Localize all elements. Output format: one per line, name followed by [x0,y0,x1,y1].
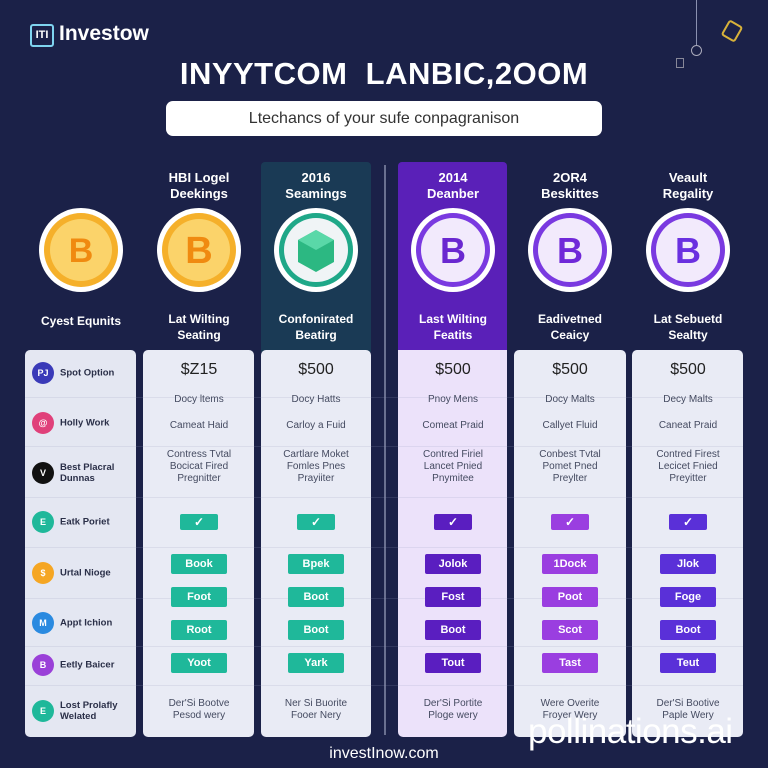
row labels panel: E [40,517,46,527]
title: INYYTCOM LANBIC,2OOM [180,56,588,91]
icon: logo mark [30,24,54,47]
column headings: 2014 [439,170,467,185]
table cells: Tast [559,657,581,669]
column headings [169,170,714,201]
table cells: Preylter [553,473,587,484]
row labels panel: Eetly Baicer [60,660,114,670]
table cells: Callyet Fluid [542,420,598,431]
table cells: Jlok [677,558,699,570]
table cells: Der'Si Portite [424,698,482,709]
row labels panel: Holly Work [60,418,109,428]
row labels panel: V [40,468,46,478]
column sublabels: Lat Wilting [168,312,230,326]
highlight panel: teal column [261,162,371,352]
table cells: Pregnitter [177,473,221,484]
coin icons: B [440,230,466,271]
table cells: Foot [187,591,211,603]
table cells: Cameat Haid [170,420,228,431]
table cells: Root [186,624,212,636]
logo text: Investow [59,22,149,45]
column headings: 2OR4 [553,170,587,185]
footer url: investInow.com [329,745,439,762]
coin icons: B [675,230,701,271]
divider [384,165,386,735]
column sublabels: Cyest Equnits [41,314,121,328]
table cells: Cartlare Moket [283,449,349,460]
row labels panel: Appt Ichion [60,618,112,628]
column headings: HBI Logel [169,170,229,185]
row labels panel: B [40,660,46,670]
column sublabels: Seating [177,328,221,342]
table cells: $500 [670,361,706,378]
table cells: $500 [298,361,334,378]
table cells: $500 [552,361,588,378]
column headings: Deanber [427,186,479,201]
table cells: ✓ [565,515,575,529]
table cells: Yark [304,657,328,669]
table cells: Docy ltems [174,394,224,405]
row labels panel: Best Placral [60,462,114,473]
table cells: Paple Wery [662,710,714,721]
row labels panel: M [39,618,47,628]
row labels panel: Welated [60,711,96,722]
row labels panel [32,362,118,722]
column headings: Beskittes [541,186,599,201]
table cells: Poot [558,591,582,603]
table cells: Tout [441,657,464,669]
highlight panel: purple column [398,162,507,352]
watermark: pollinations.ai [528,712,733,751]
row labels panel: Eatk Poriet [60,516,110,528]
table cells: Pesod wery [173,710,225,721]
table cells: Lecicet Fnied [658,461,718,472]
coin icons [39,208,730,292]
row labels panel: Urtal Nioge [60,568,111,578]
column headings: Seamings [285,186,347,201]
column sublabels: Beatirg [295,328,337,342]
subtitle box [166,101,602,136]
row labels panel: Dunnas [60,473,95,484]
row labels panel: @ [39,418,47,428]
column sublabels: Last Wilting [419,312,487,326]
column sublabels [41,312,722,342]
table cells: Contred Firiel [423,449,483,460]
table cells: ✓ [194,515,204,529]
table cells: Conbest Tvtal [539,449,601,460]
table cells: Pnymitee [432,473,474,484]
table cells: ✓ [311,515,321,529]
row labels panel: E [40,706,46,716]
row labels panel: $ [40,568,46,578]
coin icons: B [557,230,583,271]
table cells: Contress Tvtal [167,449,231,460]
table cells: Scot [558,624,582,636]
column headings: Deekings [170,186,228,201]
table cells: ✓ [448,515,458,529]
table cells: $500 [435,361,471,378]
column headings: 2016 [302,170,330,185]
table cells: Der'Si Bootive [656,698,720,709]
table cells: Decy Malts [663,394,713,405]
table cells: Were Overite [541,698,599,709]
table cells: $Z15 [181,361,217,378]
table cells: Caneat Praid [659,420,717,431]
table cells: Fooer Nery [291,710,341,721]
row labels panel: Lost Prolafly [60,700,118,711]
table cells: Bocicat Fired [170,461,228,472]
column sublabels: Ceaicy [551,328,589,342]
row labels panel: Spot Option [60,368,114,378]
table cells: Preyitter [669,473,707,484]
table cells: Contred Firest [656,449,720,460]
table cells: Comeat Praid [422,420,484,431]
table cells: Boot [440,624,466,636]
subtitle box: Ltechancs of your sufe conpagranison [249,110,519,127]
table cells: Jolok [439,558,467,570]
table cells: Book [185,558,213,570]
table cells: Docy Malts [545,394,595,405]
column headings: Regality [663,186,713,201]
column sublabels: Confonirated [279,312,353,326]
column sublabels: Eadivetned [538,312,602,326]
coin icons: B [185,230,213,272]
table cells: Carloy a Fuid [286,420,346,431]
table cells: Ner Si Buorite [285,698,347,709]
table cells: 1Dock [553,558,587,570]
table cells: Boot [675,624,701,636]
row labels panel: PJ [37,368,48,378]
table cells: Prayiiter [298,473,334,484]
table cells: ✓ [683,515,693,529]
table cells: Fomles Pnes [287,461,345,472]
table cells: Foge [675,591,701,603]
table cells: Fost [441,591,465,603]
table cells: Der'Si Bootve [169,698,229,709]
table cells: Froyer Wery [543,710,597,721]
coin icons: B [69,232,93,270]
table cells: Pomet Pned [542,461,598,472]
table cells: Docy Hatts [292,394,340,405]
table cells: Pnoy Mens [428,394,478,405]
cards [25,350,136,737]
table cells: Bpek [303,558,329,570]
logo [30,22,149,47]
table cells: Boot [303,624,329,636]
column sublabels: Sealtty [668,328,708,342]
table cells: Boot [303,591,329,603]
table cells: Yoot [187,657,211,669]
decorative node icons [676,0,742,68]
column sublabels: Featits [434,328,472,342]
table cells: Ploge wery [428,710,478,721]
column sublabels: Lat Sebuetd [654,312,722,326]
icon: logo mark: ITI [36,29,48,41]
column headings: Veault [669,170,707,185]
table cells: Teut [677,657,699,669]
table cells: Lancet Pnied [424,461,482,472]
